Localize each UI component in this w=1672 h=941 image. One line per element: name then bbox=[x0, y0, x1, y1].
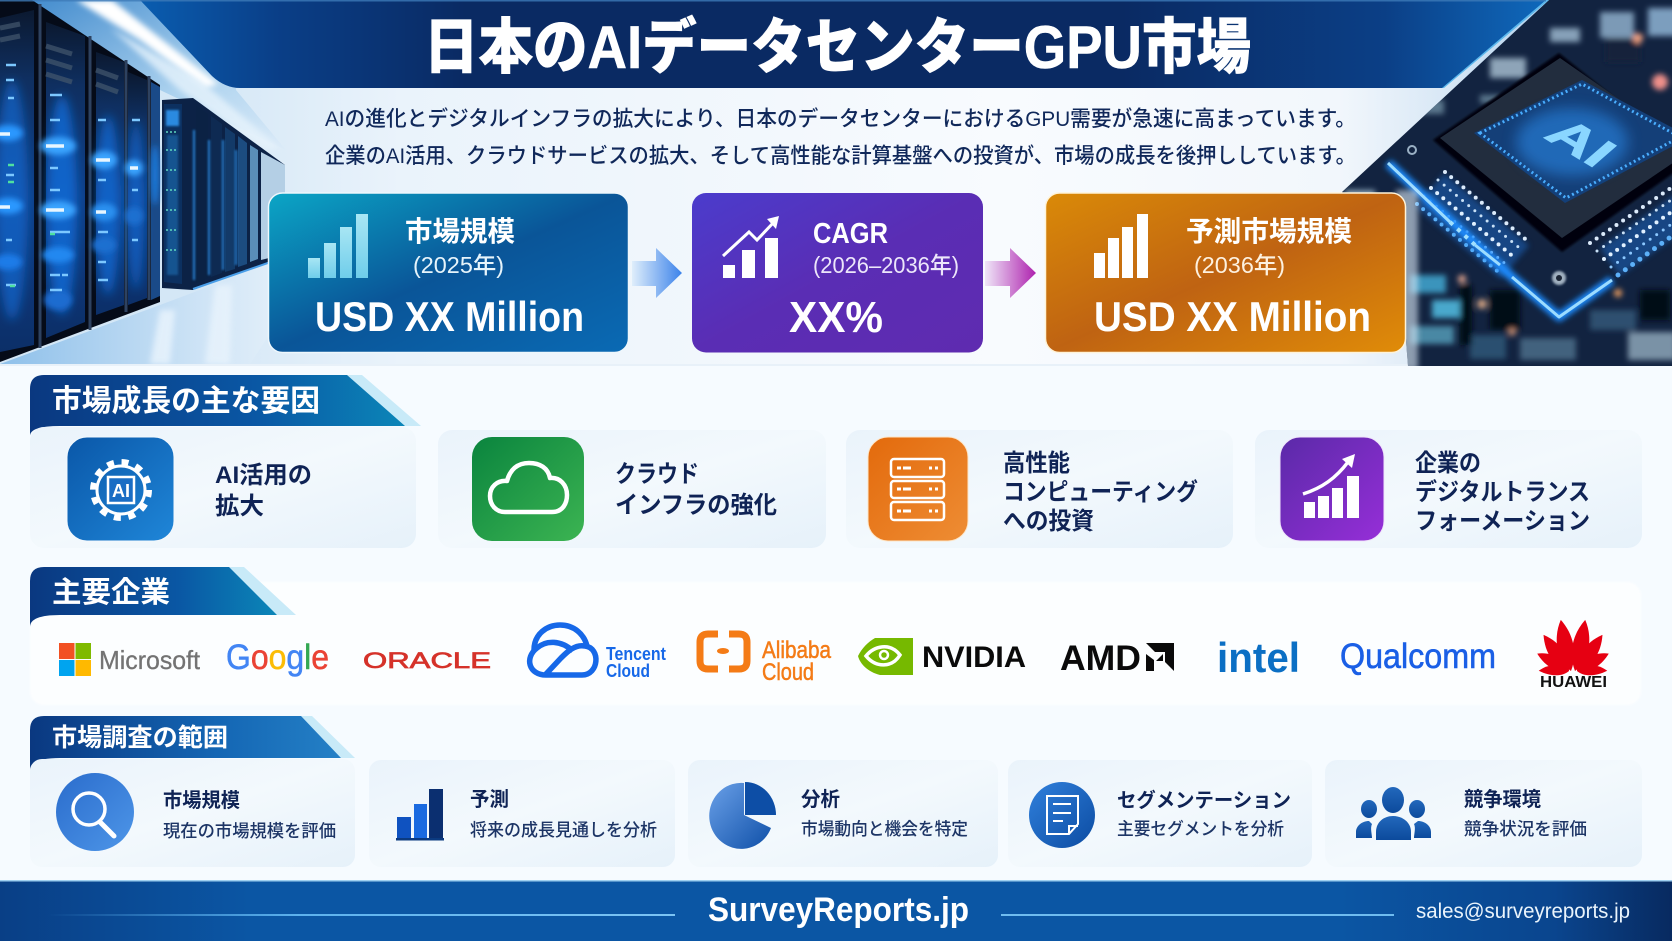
KPI card: forecast 2036: (2036年) bbox=[1194, 252, 1285, 278]
logo: Oracle: ORACLE bbox=[363, 648, 491, 673]
intro text: AIの進化とデジタルインフラの拡大により、日本のデータセンターにおけるGPU需要が急速に高まっています。 bbox=[325, 106, 1356, 131]
panel: driver AI bbox=[30, 427, 416, 548]
logo: Intel: intel bbox=[1217, 634, 1300, 681]
panel: driver DX: 企業の bbox=[1415, 450, 1481, 477]
KPI card: market size 2025: (2025年) bbox=[413, 252, 504, 278]
panel: scope competition: 競争環境 bbox=[1464, 788, 1541, 811]
icon: people bbox=[1356, 787, 1431, 840]
logo: Microsoft bbox=[59, 643, 201, 676]
icon: magnifier bbox=[56, 773, 134, 851]
panel: driver cloud bbox=[438, 430, 826, 548]
glowing server lights bbox=[0, 80, 144, 320]
KPI card: forecast 2036: USD XX Million bbox=[1094, 293, 1371, 340]
decorative band edge bbox=[1440, 0, 1549, 88]
KPI card: market size 2025: USD XX Million bbox=[315, 293, 584, 340]
logo: Qualcomm: Qualcomm bbox=[1340, 637, 1496, 676]
KPI card: forecast 2036 bbox=[1046, 193, 1406, 352]
heading: key companies: 主要企業 bbox=[52, 576, 170, 609]
photo: AI chip bbox=[1330, 0, 1672, 370]
footer brand: SurveyReports.jp bbox=[708, 891, 969, 929]
panel: scope analysis: 市場動向と機会を特定 bbox=[801, 819, 968, 839]
footer bbox=[0, 880, 1672, 941]
icon: server bbox=[868, 437, 968, 541]
heading: research scope bbox=[30, 716, 355, 770]
logo: NVIDIA: NVIDIA bbox=[922, 641, 1026, 674]
panel: driver AI: AI活用の bbox=[215, 462, 312, 489]
panel: scope segmentation: セグメンテーション bbox=[1117, 788, 1291, 812]
panel: scope competition bbox=[1325, 760, 1642, 867]
icon: AI gear bbox=[67, 437, 174, 541]
chip AI die: AI bbox=[1535, 109, 1628, 176]
panel: scope segmentation bbox=[1008, 760, 1312, 867]
panel: driver HPC: への投資 bbox=[1003, 508, 1094, 535]
KPI card: market size 2025: 市場規模 bbox=[405, 216, 515, 247]
chip AI die bbox=[1474, 80, 1672, 203]
icon: AI gear: AI bbox=[112, 481, 130, 501]
logo: Tencent Cloud: Cloud bbox=[606, 661, 650, 681]
logo: Tencent Cloud: Tencent bbox=[606, 644, 666, 664]
icon: growth chart bbox=[723, 216, 779, 278]
panel: scope segmentation: 主要セグメントを分析 bbox=[1117, 819, 1284, 839]
panel: driver cloud: インフラの強化 bbox=[615, 492, 777, 519]
glowing traces bbox=[1388, 163, 1612, 317]
icon: document bbox=[1029, 782, 1095, 848]
photo: server room bbox=[0, 0, 292, 364]
blurred board components bbox=[1345, 8, 1672, 360]
near server racks bbox=[0, 0, 160, 362]
panel: driver cloud: クラウド bbox=[615, 461, 699, 488]
icon: bars bbox=[1094, 214, 1148, 278]
KPI card: CAGR bbox=[692, 193, 983, 352]
logo: Alibaba Cloud: Cloud bbox=[762, 659, 814, 686]
heading: key companies bbox=[30, 567, 296, 627]
logo: Huawei: HUAWEI bbox=[1540, 674, 1607, 691]
heading: growth drivers: 市場成長の主な要因 bbox=[52, 385, 320, 418]
logo: Alibaba Cloud bbox=[700, 634, 832, 686]
panel: driver HPC bbox=[846, 430, 1233, 548]
icon: pie chart bbox=[709, 782, 776, 849]
logo: Tencent Cloud bbox=[530, 625, 666, 681]
panel: scope analysis: 分析 bbox=[801, 788, 840, 811]
chip pins bbox=[1417, 172, 1672, 275]
title: 日本のAIデータセンターGPU市場 bbox=[424, 14, 1251, 81]
logo: AMD bbox=[1060, 639, 1174, 678]
intro text bbox=[325, 106, 1356, 168]
heading: growth drivers bbox=[30, 375, 421, 436]
panel: scope analysis bbox=[688, 760, 998, 867]
panel: scope forecast: 将来の成長見通しを分析 bbox=[470, 820, 657, 840]
icon: bars bbox=[308, 214, 368, 278]
panel: driver DX: デジタルトランス bbox=[1415, 478, 1590, 506]
panel: driver DX: フォーメーション bbox=[1415, 508, 1590, 535]
chip package bbox=[1433, 53, 1672, 252]
panel: scope market size: 現在の市場規模を評価 bbox=[163, 821, 336, 841]
panel: driver HPC: 高性能 bbox=[1003, 450, 1070, 477]
KPI card: CAGR: XX% bbox=[789, 293, 883, 342]
panel: scope market size: 市場規模 bbox=[163, 789, 240, 812]
title band bbox=[140, 0, 1546, 88]
panel: scope market size bbox=[30, 759, 355, 867]
KPI card: forecast 2036: 予測市場規模 bbox=[1186, 216, 1352, 247]
logo: Microsoft: Microsoft bbox=[99, 645, 201, 675]
arrow bbox=[985, 248, 1036, 298]
arrow bbox=[632, 248, 682, 298]
panel: scope forecast bbox=[369, 760, 675, 867]
logo: Google: Google bbox=[226, 638, 329, 677]
KPI card: market size 2025 bbox=[268, 193, 628, 352]
panel: scope forecast: 予測 bbox=[470, 788, 509, 811]
logo: Huawei bbox=[1535, 619, 1611, 691]
distant server rack row bbox=[162, 98, 285, 290]
heading: research scope: 市場調査の範囲 bbox=[52, 724, 228, 752]
panel: hero bbox=[0, 0, 1672, 370]
logo: AMD: AMD bbox=[1060, 639, 1141, 678]
panel: driver AI: 拡大 bbox=[215, 493, 264, 520]
panel: company logos bbox=[30, 582, 1641, 705]
logo: Alibaba Cloud: Alibaba bbox=[762, 637, 832, 664]
fading edge bbox=[1396, 190, 1418, 370]
intro text: 企業のAI活用、クラウドサービスの拡大、そして高性能な計算基盤への投資が、市場の成長を後押ししています。 bbox=[325, 144, 1356, 168]
panel: driver DX bbox=[1255, 430, 1642, 548]
footer email: sales@surveyreports.jp bbox=[1416, 900, 1630, 923]
panel: driver HPC: コンピューティング bbox=[1003, 478, 1198, 506]
panel: scope competition: 競争状況を評価 bbox=[1464, 819, 1587, 839]
logo: NVIDIA bbox=[858, 638, 1026, 675]
icon: cloud bbox=[472, 437, 584, 541]
icon: growth bbox=[1280, 437, 1384, 541]
icon: bar chart bbox=[396, 789, 444, 840]
KPI card: CAGR: (2026–2036年) bbox=[813, 252, 959, 278]
KPI card: CAGR: CAGR bbox=[813, 218, 888, 250]
